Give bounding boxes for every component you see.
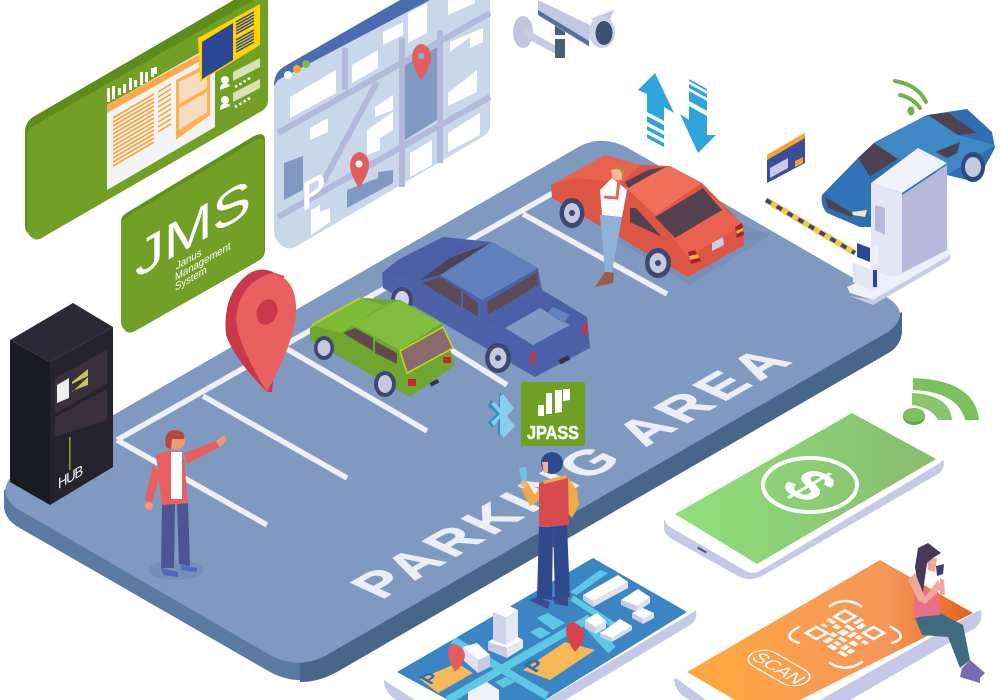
scan screen [687,560,973,700]
green car windows [343,328,373,351]
blue car at gate [822,109,995,227]
QR code [803,609,887,657]
map app pin left [448,644,465,672]
hub label: HUB [58,461,83,493]
blue pickup truck [382,237,590,377]
red car rear window [655,188,722,238]
icon: wifi small [895,81,926,115]
truck bed [487,290,587,348]
red car [551,155,770,285]
browser header [274,0,430,86]
gate control box [852,243,878,290]
JMS subtitle: Janus [176,246,202,273]
JMS subtitle: Management [175,240,231,284]
map blocks [290,0,483,235]
JPASS chart mark [538,389,570,416]
user rows [220,58,260,110]
dashboard bar chart [107,67,157,102]
icon: security camera [513,0,615,58]
icon: upload arrow [638,73,674,147]
payment screen [675,413,936,564]
parking lot left [415,663,473,693]
map P label: P [302,164,325,221]
person: woman seated using phone [908,543,985,683]
phone: map app [384,550,696,700]
phone: payment [664,406,944,579]
yellow and blue profile card [198,4,260,82]
panel: JMS logo card [121,134,265,333]
green car wheels [314,336,396,397]
map screen [397,558,687,700]
map pin lower [350,152,369,188]
scan brackets [790,601,901,668]
map app pin right [566,622,584,652]
person: man in red jacket [145,430,227,580]
person: man on phone by red car [595,166,627,287]
person: man with backpack using phone [519,452,579,609]
icon: bluetooth [488,393,515,438]
parking bay lines [117,193,667,525]
truck windows [422,277,461,307]
SCAN pill button: SCAN [746,650,810,687]
red car lights [688,223,744,264]
parking lot right: P [518,656,552,676]
map pin upper [412,44,431,80]
icon: large location pin [225,269,296,392]
panel: green dashboard screen [25,0,268,240]
JMS subtitle: System [175,264,207,294]
JMS wordmark: JMS [135,167,251,290]
browser buttons [284,60,310,79]
floor text: parking area: PARKING AREA [337,342,804,605]
dollar symbol: $ [766,460,853,510]
icon: wifi large [903,378,979,425]
map blue areas [284,47,437,208]
parking lot left: P [415,670,446,688]
JPASS label: JPASS [527,423,579,443]
hub keypad panel [55,350,107,470]
panel: map browser window [274,0,490,248]
map app roads [448,570,618,700]
map app buildings [463,575,654,700]
phone: QR scan [674,556,981,700]
parking platform [4,141,902,682]
JPASS badge [521,382,585,446]
hub cabinet [10,303,113,505]
map roads [278,13,490,217]
parking lot right [518,642,595,680]
green car [310,298,455,397]
gate kiosk [847,148,950,305]
icon: access card [767,133,805,183]
icon: download arrow [680,79,716,153]
parking gate barrier arm [766,200,855,253]
truck wheels [391,287,511,373]
blue car windows [858,143,898,176]
blue car wheel [961,152,985,182]
blue car front grille [825,197,852,217]
dashboard document [107,44,215,190]
red car wheels [560,198,671,278]
